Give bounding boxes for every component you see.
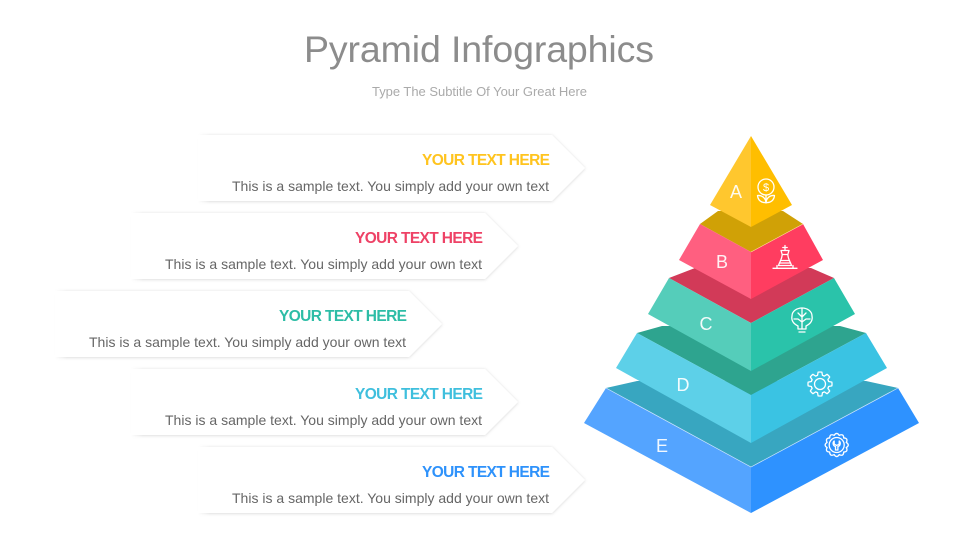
text C: This is a sample text. You simply add your own text (89, 334, 406, 350)
letter B: B (716, 252, 728, 272)
letter A: A (730, 182, 742, 202)
subtitle: Type The Subtitle Of Your Great Here (372, 84, 587, 99)
letter D: D (676, 375, 690, 395)
panel: text arrow B (125, 208, 518, 284)
text B: This is a sample text. You simply add your own text (165, 256, 482, 272)
text A: This is a sample text. You simply add your own text (232, 178, 549, 194)
text D: This is a sample text. You simply add your own text (165, 412, 482, 428)
heading D: YOUR TEXT HERE (355, 386, 483, 403)
icon: brain bulb (792, 308, 812, 332)
panel: text arrow D (125, 364, 518, 440)
tier C (648, 268, 855, 371)
panel: text arrow A (192, 130, 585, 206)
letter C: C (700, 314, 712, 334)
panel: text arrow C (49, 286, 442, 362)
tier A (710, 136, 792, 227)
icon: chess king (773, 246, 797, 268)
icon: gear (808, 372, 832, 396)
panel: text arrow E (192, 442, 585, 518)
letter E: E (656, 436, 668, 456)
heading C: YOUR TEXT HERE (279, 308, 407, 325)
heading E: YOUR TEXT HERE (422, 464, 550, 481)
tier B (679, 211, 823, 299)
tier E (584, 381, 919, 513)
tier D (616, 326, 887, 443)
text E: This is a sample text. You simply add your own text (232, 490, 549, 506)
title: Pyramid Infographics (304, 28, 654, 70)
icon: money flower: $ (763, 182, 769, 194)
heading B: YOUR TEXT HERE (355, 230, 483, 247)
heading A: YOUR TEXT HERE (422, 152, 550, 169)
icon: gear with wrench (825, 433, 848, 457)
pyramid (584, 136, 919, 513)
